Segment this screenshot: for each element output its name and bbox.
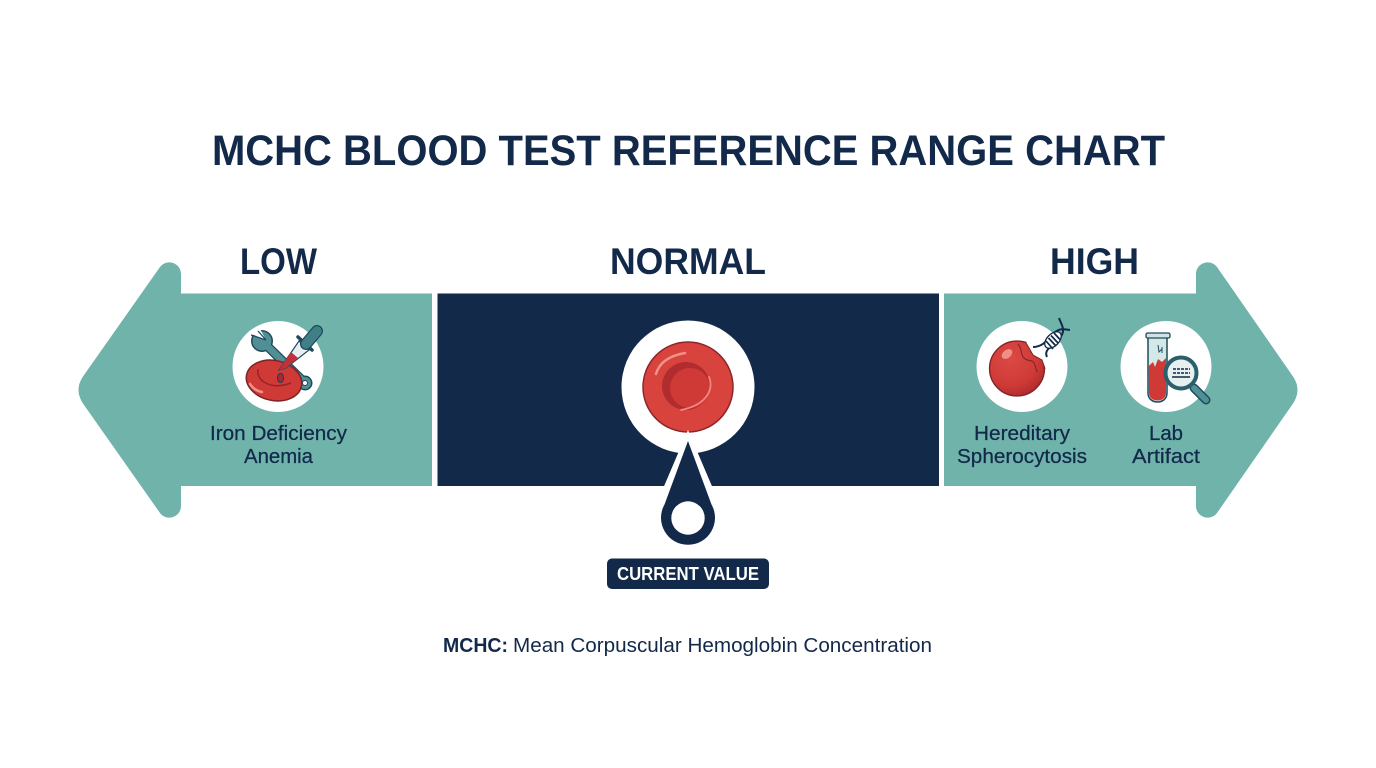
icon: test tube and magnifier	[1120, 321, 1212, 412]
label: lab artifact: Lab	[1149, 423, 1183, 445]
heading: high: HIGH	[1050, 241, 1139, 282]
current value badge	[607, 558, 769, 589]
label: iron deficiency anemia: Iron Deficiency	[210, 423, 347, 445]
title: MCHC BLOOD TEST REFERENCE RANGE CHART	[212, 127, 1165, 175]
icon: healthy red blood cell	[622, 320, 754, 454]
footnote: Mean Corpuscular Hemoglobin Concentration	[513, 635, 932, 657]
label: hereditary spherocytosis: Hereditary	[974, 423, 1070, 445]
panel: normal range	[438, 294, 939, 545]
panel: high arrow	[944, 262, 1298, 518]
current value badge: CURRENT VALUE	[617, 564, 759, 584]
heading: normal: NORMAL	[610, 241, 766, 282]
panel: low arrow	[78, 262, 432, 518]
icon: spherocyte with DNA	[976, 318, 1070, 412]
label: hereditary spherocytosis: Spherocytosis	[957, 446, 1087, 468]
footnote: MCHC:	[443, 635, 508, 657]
label: lab artifact: Artifact	[1132, 446, 1200, 468]
icon: value pointer pin	[656, 430, 720, 545]
label: iron deficiency anemia: Anemia	[244, 446, 314, 468]
icon: red blood cell with wrench and dropper	[232, 321, 324, 412]
heading: low: LOW	[240, 241, 317, 282]
